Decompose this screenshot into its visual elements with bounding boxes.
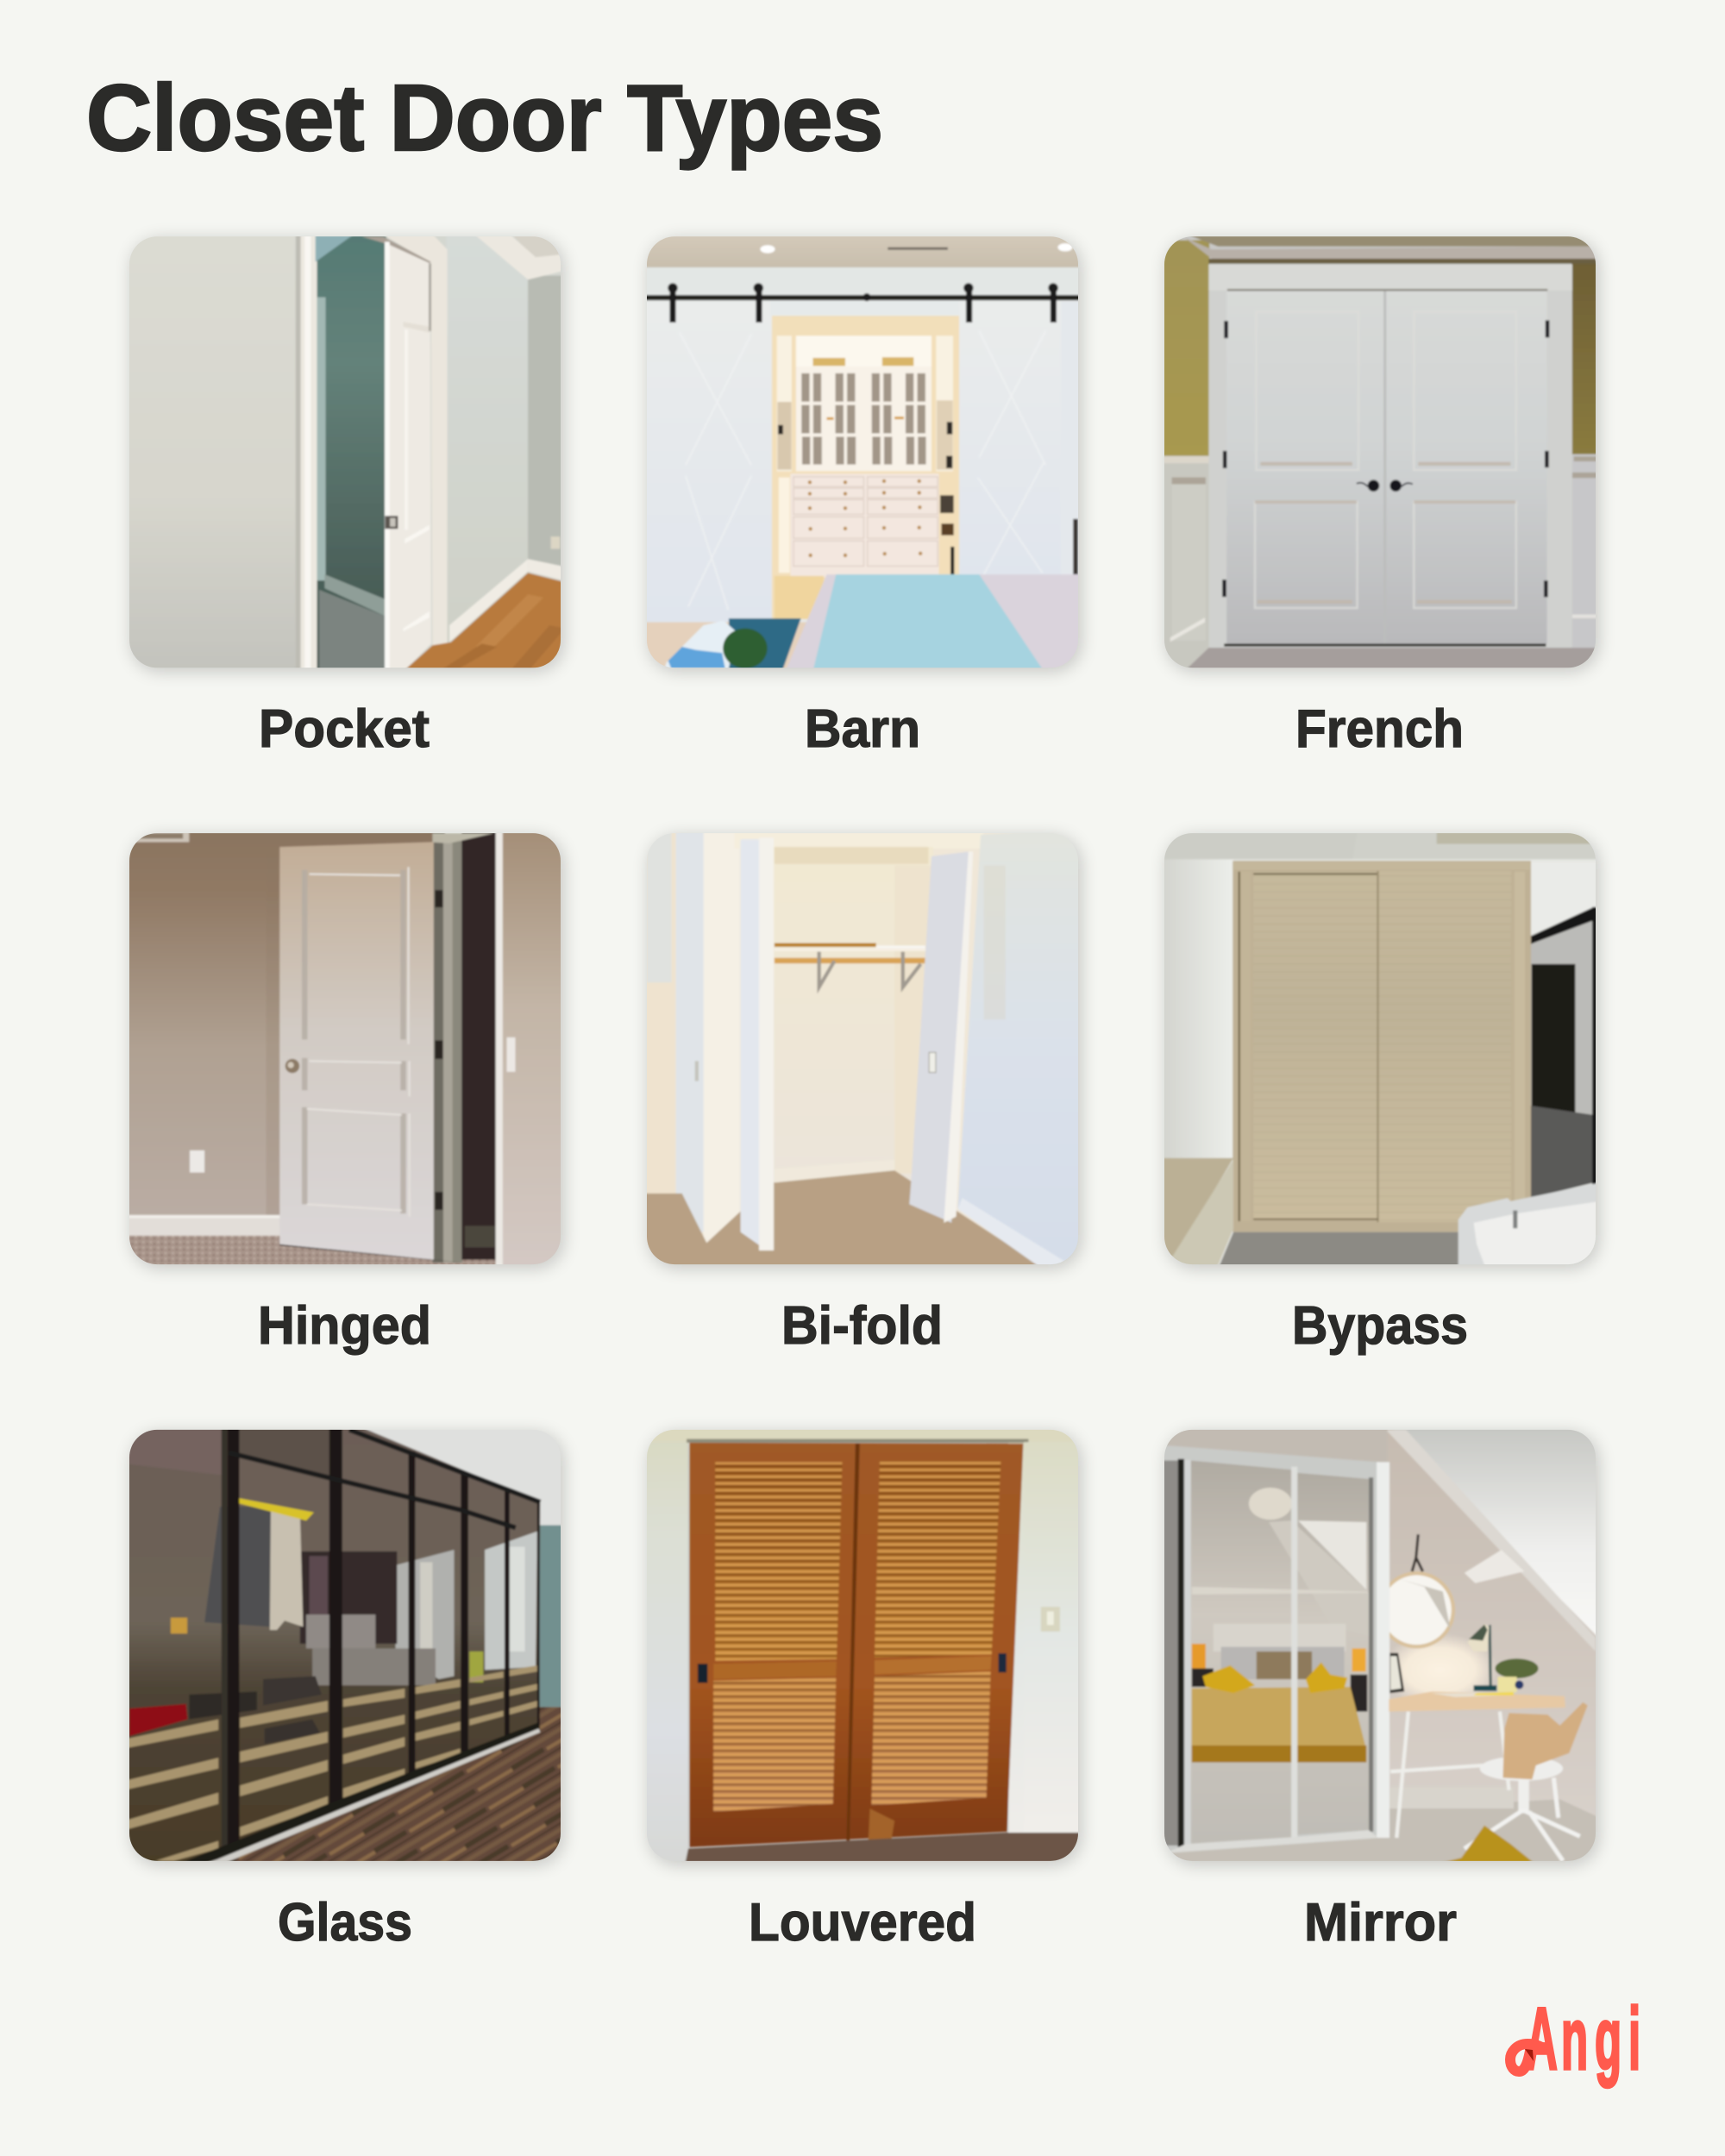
reflected slope bbox=[1269, 1520, 1369, 1636]
label: Bi-fold: Bi-fold bbox=[781, 1296, 943, 1356]
ceiling bbox=[647, 236, 1078, 268]
light switch bbox=[1041, 1607, 1060, 1632]
ceiling bbox=[124, 1424, 565, 1562]
sliding door bbox=[390, 245, 431, 667]
teal room beyond bbox=[317, 231, 386, 672]
floor bbox=[1218, 1232, 1461, 1269]
sliding doors bbox=[770, 316, 773, 619]
yellow rail bbox=[232, 1497, 314, 1520]
reflected headboard bbox=[1214, 1624, 1346, 1651]
bench bbox=[729, 618, 801, 672]
label: Barn: Barn bbox=[805, 699, 920, 759]
red garment bbox=[129, 1704, 187, 1736]
bags bbox=[189, 1691, 257, 1720]
far wall bbox=[528, 275, 561, 566]
closet back wall bbox=[773, 847, 933, 1182]
panel: Mirror bbox=[1159, 1424, 1600, 1952]
label: Glass: Glass bbox=[278, 1893, 412, 1952]
lamps bbox=[1192, 1644, 1206, 1669]
carpet bbox=[1165, 1799, 1600, 1864]
desk legs bbox=[1390, 1712, 1509, 1838]
photo: louvered doors bbox=[642, 1424, 1082, 1864]
bed bbox=[785, 574, 1082, 672]
panel: Bi-fold bbox=[642, 829, 1082, 1356]
sloped ceiling bbox=[1388, 1424, 1600, 1639]
closet frame bbox=[1163, 1445, 1380, 1853]
shelves bbox=[124, 1665, 537, 1861]
wainscoting left bbox=[1159, 456, 1214, 672]
mid rails bbox=[713, 1661, 837, 1679]
closet interior bbox=[771, 316, 959, 619]
door jamb trim bbox=[301, 231, 318, 672]
photo: bi-fold doors bbox=[642, 829, 1082, 1269]
door casing bbox=[1208, 264, 1572, 648]
door pulls bbox=[698, 1664, 707, 1683]
bedspread bbox=[1192, 1687, 1366, 1750]
black frame verticals bbox=[222, 1424, 540, 1850]
photo: pocket door bbox=[124, 231, 565, 672]
panel: Bypass bbox=[1159, 829, 1600, 1356]
closet edge over mirror bbox=[1377, 1553, 1389, 1658]
chair base bbox=[1518, 1779, 1529, 1813]
closet frame bbox=[432, 829, 445, 1263]
header bbox=[734, 829, 984, 849]
plant bbox=[723, 629, 768, 668]
upper cabinets bbox=[796, 335, 932, 367]
walls and ceiling bbox=[1159, 829, 1600, 1269]
right wall bbox=[496, 829, 503, 1269]
right room bbox=[1529, 862, 1600, 935]
baseboards bbox=[449, 559, 528, 642]
photo: bypass doors bbox=[1159, 829, 1600, 1269]
panel: French bbox=[1159, 231, 1600, 759]
hinges bbox=[1222, 320, 1549, 597]
mustard walls bbox=[1159, 241, 1209, 456]
left wall bbox=[129, 548, 296, 667]
black frame top rails bbox=[229, 1430, 540, 1527]
door bbox=[279, 842, 434, 1260]
doors bbox=[1253, 874, 1378, 1219]
photo: barn doors bbox=[642, 231, 1082, 672]
wall bbox=[1159, 1424, 1600, 1864]
round mirror bbox=[1378, 1571, 1455, 1648]
baseboard bbox=[124, 1215, 281, 1236]
label: Mirror: Mirror bbox=[1304, 1893, 1457, 1952]
panels bbox=[304, 870, 403, 1213]
label: Hinged: Hinged bbox=[258, 1296, 431, 1356]
photo: glass doors bbox=[124, 1424, 565, 1864]
bench bbox=[1159, 1158, 1233, 1257]
logo loop bbox=[1510, 2044, 1546, 2071]
chair seat bbox=[1480, 1756, 1563, 1781]
bed runner bbox=[812, 574, 1044, 672]
glass wardrobe body bbox=[124, 1424, 540, 1864]
curtain bbox=[540, 1526, 565, 1707]
top trim and right casing bbox=[384, 236, 448, 645]
carpet bbox=[642, 1170, 1045, 1269]
folded panel left bbox=[676, 829, 705, 1232]
carpet bbox=[124, 1236, 500, 1269]
clothes bbox=[204, 1507, 271, 1626]
dark hanging zone bbox=[300, 1551, 397, 1644]
crown and ceiling bbox=[514, 236, 555, 255]
floor track bbox=[204, 1728, 540, 1864]
label: French: French bbox=[1295, 699, 1464, 759]
double doors bbox=[1226, 291, 1547, 643]
plant and mug bbox=[1496, 1658, 1539, 1678]
desk bbox=[1389, 1691, 1565, 1712]
far left wall bbox=[642, 829, 682, 1195]
right wall bbox=[957, 829, 1082, 1269]
panel: Louvered bbox=[642, 1424, 1082, 1952]
drawers bbox=[790, 473, 939, 577]
hinges bbox=[435, 890, 443, 907]
picture frame bbox=[1389, 1653, 1404, 1693]
chair back bbox=[1502, 1702, 1588, 1779]
wardrobe frame bbox=[1233, 861, 1531, 1232]
center meeting stile bbox=[846, 1444, 860, 1842]
logo: Angi: Angi bbox=[1526, 1990, 1640, 2089]
panel: Glass bbox=[124, 1424, 565, 1952]
floor bbox=[642, 622, 808, 672]
logo fold bbox=[1525, 2049, 1534, 2061]
mirror divider rails bbox=[1291, 1467, 1297, 1838]
wall glow bbox=[1381, 1633, 1498, 1707]
right bi-fold door bbox=[909, 851, 969, 1223]
handles bbox=[1368, 479, 1379, 492]
right wall bbox=[449, 614, 460, 623]
door frame bbox=[690, 1443, 1023, 1847]
floor bbox=[403, 573, 565, 672]
wall bbox=[124, 829, 436, 1269]
mirror left bbox=[1191, 1461, 1291, 1844]
floor bbox=[685, 1833, 1082, 1864]
window glow bbox=[396, 1550, 454, 1679]
photo: french doors bbox=[1159, 231, 1600, 672]
raised panels bbox=[1255, 311, 1516, 608]
shelf brackets bbox=[819, 952, 920, 987]
label: Pocket: Pocket bbox=[259, 699, 430, 759]
knob bbox=[285, 1059, 299, 1073]
repair patch bbox=[869, 1808, 894, 1841]
bed reflection bbox=[306, 1614, 375, 1648]
column bbox=[704, 829, 740, 1243]
X pattern on doors bbox=[711, 524, 1011, 561]
title: Closet Door Types bbox=[86, 66, 883, 171]
inner baseboard bbox=[775, 1160, 894, 1182]
panel: Pocket bbox=[124, 231, 565, 759]
floor bbox=[124, 1707, 565, 1864]
photo: hinged door bbox=[124, 829, 564, 1269]
label: Bypass: Bypass bbox=[1292, 1296, 1468, 1356]
flowers bbox=[663, 621, 736, 672]
shelf bbox=[775, 943, 876, 947]
lamp bbox=[1477, 1626, 1490, 1687]
crown moulding bbox=[1178, 231, 1600, 247]
left bi-fold door bbox=[741, 839, 767, 1250]
towels bbox=[1202, 1665, 1255, 1693]
walls bbox=[642, 1424, 688, 1864]
door pull bbox=[385, 516, 398, 529]
photo: mirror doors bbox=[1159, 1424, 1600, 1864]
carpet bbox=[1184, 648, 1600, 672]
track and hangers bbox=[642, 295, 1082, 300]
bed bbox=[1458, 1182, 1600, 1269]
outlet bbox=[190, 1150, 204, 1173]
top ceiling above closet bbox=[1159, 1424, 1388, 1463]
mirror hook bbox=[1412, 1534, 1423, 1571]
panel: Hinged bbox=[124, 829, 564, 1356]
panel: Barn bbox=[642, 231, 1082, 759]
mirror right bbox=[1297, 1473, 1369, 1834]
louver panels bbox=[715, 1462, 842, 1661]
mustard throw bbox=[1437, 1826, 1535, 1864]
label: Louvered: Louvered bbox=[749, 1893, 976, 1952]
wainscoting right bbox=[1571, 454, 1600, 649]
